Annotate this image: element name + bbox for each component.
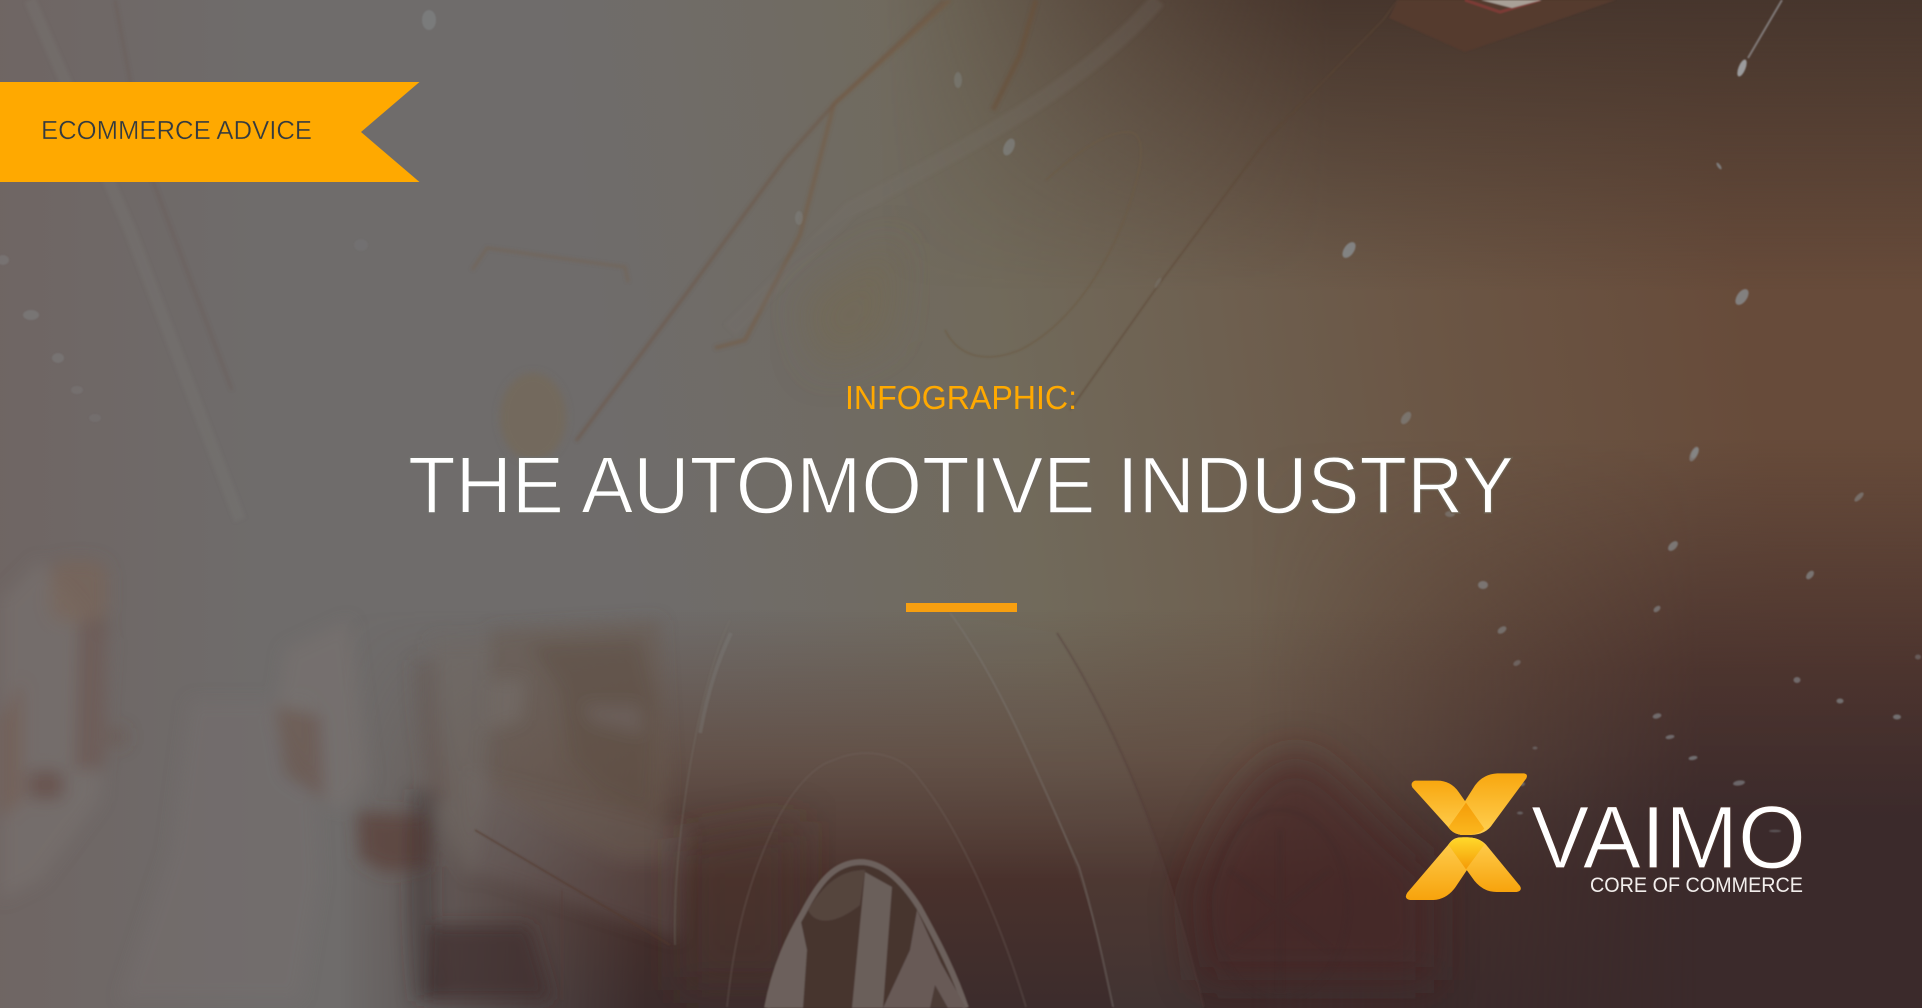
window and pillar lines bbox=[472, 0, 1161, 442]
logo mark: yellow X bbox=[1406, 773, 1527, 900]
left: pale parked cars and aisle bbox=[0, 560, 690, 1000]
wheel rim bbox=[767, 862, 966, 1008]
car door seam bbox=[474, 756, 692, 945]
accent bar bbox=[906, 603, 1017, 612]
wheel arch and tyre bbox=[950, 613, 1204, 1008]
eyebrow: infographic: INFOGRAPHIC: bbox=[845, 379, 1077, 416]
streak of water near the top right bbox=[1735, 0, 1782, 78]
second wheel in reflection bbox=[1209, 745, 1397, 872]
logo wordmark: VAIMO bbox=[1531, 787, 1806, 887]
logo: Vaimo core of commerce bbox=[1406, 773, 1806, 900]
banner ribbon: ecommerce advice bbox=[0, 82, 420, 182]
fuel door and body creases bbox=[945, 195, 1225, 410]
ribbon label: ECOMMERCE ADVICE bbox=[41, 115, 312, 145]
title: THE AUTOMOTIVE INDUSTRY bbox=[408, 441, 1514, 531]
logo tagline: CORE OF COMMERCE bbox=[1590, 873, 1803, 897]
wing mirror bbox=[500, 373, 566, 461]
ribbon shape bbox=[0, 82, 420, 182]
tail light bbox=[1389, 0, 1616, 52]
